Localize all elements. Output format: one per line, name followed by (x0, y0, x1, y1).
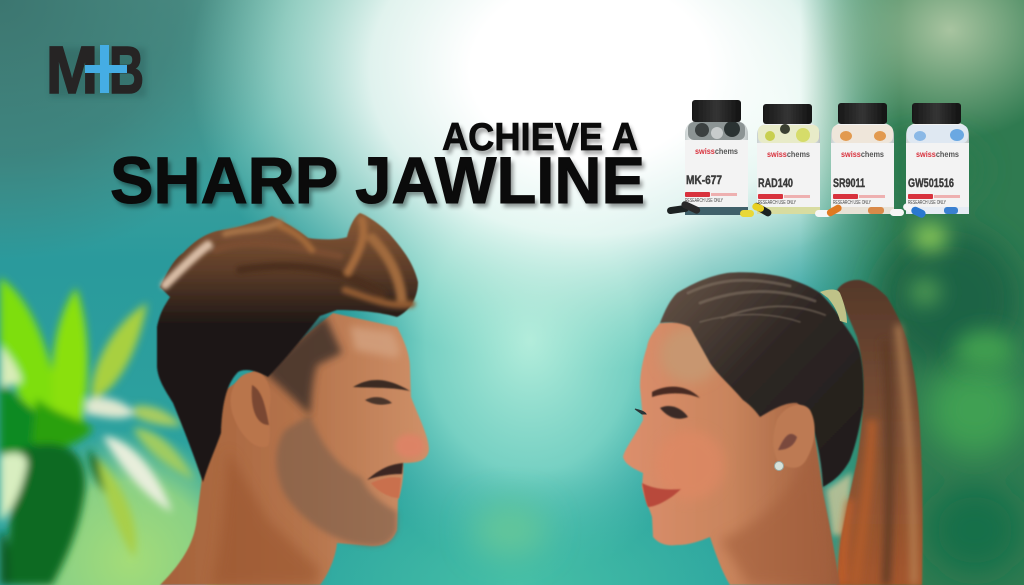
bottle: RAD140: RESEARCH USE ONLY (758, 200, 796, 206)
woman: inner ear (778, 434, 797, 450)
woman: neck shadow (720, 440, 832, 585)
woman: eyelashes (635, 409, 646, 414)
bottle: SR9011: RESEARCH USE ONLY (833, 200, 871, 206)
background: bright bokeh in foliage (909, 223, 1015, 370)
bottle: MK-677: swisschems (695, 146, 738, 156)
bottle: GW501516: swisschems (916, 149, 959, 159)
woman: eye (660, 406, 688, 419)
man: shirt collar (160, 580, 208, 585)
woman: cheek glow (655, 430, 725, 500)
man in profile (157, 213, 429, 585)
bottle: SR9011: swisschems (841, 149, 884, 159)
woman: cream gap behind neck (826, 472, 852, 535)
bottle: RAD140: RAD140 (758, 178, 793, 190)
man: beard (276, 415, 397, 546)
man: forehead highlight (350, 326, 399, 358)
woman: ear (773, 405, 815, 468)
heading line 1: ACHIEVE A (442, 116, 638, 159)
heading line 2: SHARP JAWLINE (110, 143, 645, 217)
woman: earring (774, 462, 784, 470)
logo shadow (50, 48, 146, 97)
woman: hair scrunchie (820, 289, 847, 323)
woman: neck and face (623, 320, 840, 585)
man: neck shadow (212, 450, 320, 585)
woman: hair strands (688, 280, 825, 322)
heading (110, 116, 648, 221)
woman: forehead shadow (660, 327, 720, 383)
man: inner ear (252, 385, 269, 425)
bottle: MK-677: RESEARCH USE ONLY (685, 198, 723, 204)
bottle: GW501516: GW501516 (908, 178, 954, 190)
man: moustache (367, 463, 403, 480)
woman: ponytail highlights (842, 325, 914, 585)
bottle: GW501516 (902, 103, 969, 219)
man: eyebrow (353, 380, 410, 391)
bottle: MK-677: MK-677 (686, 175, 722, 187)
man: faded sideburn (262, 316, 342, 415)
heading shadow: SHARP JAWLINE (113, 147, 648, 221)
logo plus sign (85, 45, 127, 93)
man: eye (365, 397, 392, 405)
plant: blurred green leaves at left (0, 278, 194, 585)
man: ear (231, 372, 271, 447)
bottle: MK-677 (667, 100, 748, 215)
man: neck and face (160, 313, 429, 585)
woman in profile (623, 272, 923, 585)
bottle: RAD140 (740, 104, 820, 218)
woman: eyebrow (652, 387, 700, 398)
man: nose highlight (395, 434, 425, 458)
bottle: RAD140: swisschems (767, 149, 810, 159)
bottle: SR9011: SR9011 (833, 178, 865, 190)
bottle: GW501516: RESEARCH USE ONLY (908, 200, 946, 206)
bottle: SR9011 (815, 103, 904, 217)
man: hair highlights (165, 220, 412, 305)
logo letter B: B (109, 33, 144, 108)
logo letter M: M (46, 33, 98, 108)
woman: ponytail (837, 280, 923, 585)
woman: hair (660, 272, 864, 487)
woman: lips (642, 483, 681, 507)
heading shadow: ACHIEVE A (445, 120, 640, 163)
logo: M+B (46, 33, 146, 108)
man: hair (157, 213, 418, 482)
man: lips (371, 477, 401, 498)
